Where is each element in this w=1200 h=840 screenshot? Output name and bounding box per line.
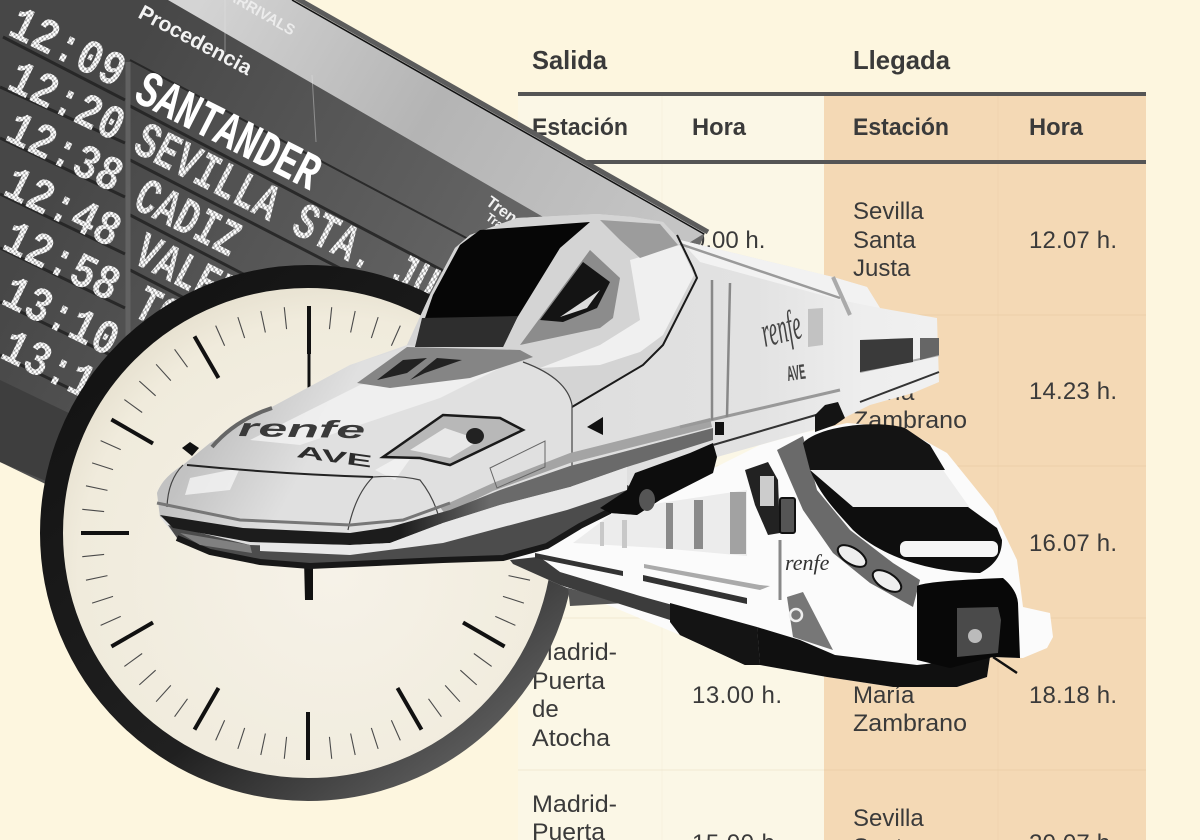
- column headings: Estación: [853, 114, 949, 141]
- wall clock: [52, 276, 564, 790]
- row 4: Zambrano: [853, 710, 967, 737]
- hour ticks: [81, 306, 535, 760]
- row 4: Madrid-: [532, 639, 617, 666]
- row 1: Santa: [853, 227, 916, 254]
- departure columns band: [518, 96, 824, 840]
- destinations: SANTANDER: [125, 62, 329, 205]
- white lower band: [260, 467, 627, 555]
- arrival times: [0, 0, 135, 425]
- carriage stripes: [535, 553, 747, 604]
- rear roof band: [680, 240, 880, 308]
- thin nose stripe: [157, 503, 450, 525]
- windscreen: [415, 222, 590, 347]
- column headings: Hora: [1029, 114, 1084, 141]
- row 3: 16.07 h.: [1029, 530, 1117, 557]
- procedencia label: Procedencia: [135, 1, 256, 80]
- arrival times: 12:38: [0, 102, 132, 207]
- grey cowl: [357, 347, 533, 388]
- cab side window: [520, 250, 620, 345]
- AVE high-speed train: [157, 214, 939, 567]
- cab body line: [572, 235, 697, 407]
- column headings: Estación: [532, 114, 628, 141]
- light upper panel: [168, 0, 705, 273]
- Renfe commuter train: [510, 423, 1053, 687]
- destinations: VALENCIA: [124, 224, 309, 357]
- renfe logo on side: renfe: [756, 301, 806, 357]
- destinations: CADIZ: [124, 169, 249, 272]
- skirt: [757, 627, 990, 687]
- row 2: Zambrano: [853, 407, 967, 434]
- panel hatch: [490, 441, 545, 488]
- bumper: [917, 578, 1020, 668]
- roof and windscreen: [803, 424, 945, 470]
- board top edge: [296, 0, 708, 232]
- row 1: 9.00 h.: [692, 227, 765, 254]
- door: [712, 280, 730, 420]
- train label: Train: [483, 210, 515, 238]
- coupler: [815, 402, 845, 432]
- destinations: SEVILLA STA. JUSTA: [124, 113, 506, 347]
- triangle mark: [587, 417, 603, 435]
- pole: [778, 540, 782, 600]
- row 1: [532, 198, 1117, 282]
- clock rim: [52, 276, 564, 790]
- row 3: 13.00 h.: [692, 530, 779, 557]
- lower skirt: [168, 485, 660, 567]
- row 4: de: [532, 696, 559, 723]
- bogie: [670, 603, 760, 665]
- bogie: [600, 443, 717, 515]
- row 1: Madrid-: [532, 198, 613, 225]
- row 4: María: [853, 682, 915, 709]
- row 4: 18.18 h.: [1029, 682, 1117, 709]
- train silhouette: [157, 214, 939, 567]
- bottom grille: [0, 380, 100, 495]
- departures board photo: [0, 0, 708, 520]
- group headings: [532, 45, 951, 75]
- timetable table: [518, 45, 1146, 840]
- arrival columns band: [824, 96, 1146, 840]
- board remnant below rail: [568, 588, 626, 606]
- headlight: [383, 415, 523, 465]
- row 1: Puerta: [532, 227, 603, 254]
- tren label: Tren: [483, 193, 520, 227]
- clock hands: [182, 354, 313, 600]
- minute ticks: [82, 307, 534, 759]
- grey badge: [787, 592, 833, 650]
- row 4: [532, 639, 1117, 752]
- headlights: [834, 541, 870, 571]
- nose highlights: [250, 368, 500, 445]
- row 4: 13.00 h.: [692, 682, 782, 709]
- dark side band: [160, 428, 713, 545]
- arrival times: 12:20: [0, 51, 134, 156]
- column headings: Hora: [692, 114, 747, 141]
- row 5: Sevilla: [853, 805, 924, 832]
- row 5: [532, 791, 1117, 840]
- nose hood: [157, 347, 572, 555]
- row 2: Málaga: [853, 350, 932, 377]
- row 2: María: [853, 379, 915, 406]
- row 2: [853, 350, 1117, 434]
- destinations: TOLEDO: [124, 277, 269, 390]
- rear carriage windows: [860, 338, 913, 372]
- row separators: [0, 37, 610, 420]
- small window: [808, 308, 823, 347]
- cab highlights: [540, 245, 694, 368]
- row 4: Atocha: [532, 725, 611, 752]
- vents: [377, 358, 462, 380]
- renfe logo on nose: renfe: [238, 415, 365, 444]
- row 1: Justa: [853, 255, 911, 282]
- light side stripe: [440, 418, 712, 514]
- row 3: [692, 530, 1117, 557]
- row 5: Madrid-: [532, 791, 617, 818]
- scratches: [225, 0, 316, 142]
- cab shell: [407, 214, 697, 407]
- grey front band: [777, 436, 920, 607]
- group headings: Salida: [532, 45, 608, 75]
- skirt lower shadow: [177, 511, 610, 566]
- rail: [510, 557, 760, 665]
- grey rim on nose: [212, 408, 272, 447]
- row 4: Puerta: [532, 668, 606, 695]
- row 1: Sevilla: [853, 198, 924, 225]
- clock face: [58, 283, 558, 783]
- AVE logo on nose: AVE: [295, 442, 373, 472]
- cab door frame: [745, 462, 780, 535]
- rear stripes: [680, 390, 840, 427]
- train body: [510, 423, 1053, 687]
- carriage windows: [573, 490, 747, 556]
- row 1: 12.07 h.: [1029, 227, 1117, 254]
- row 2: 14.23 h.: [1029, 378, 1117, 405]
- nose seam: [523, 362, 572, 548]
- grey skirt patch: [180, 533, 252, 553]
- column headings: [532, 114, 1084, 141]
- AVE logo on side: AVE: [785, 360, 807, 386]
- lower white sill: [537, 555, 770, 632]
- front panel lines: [167, 465, 443, 540]
- logo: renfe: [785, 550, 830, 575]
- group headings: Llegada: [853, 45, 951, 75]
